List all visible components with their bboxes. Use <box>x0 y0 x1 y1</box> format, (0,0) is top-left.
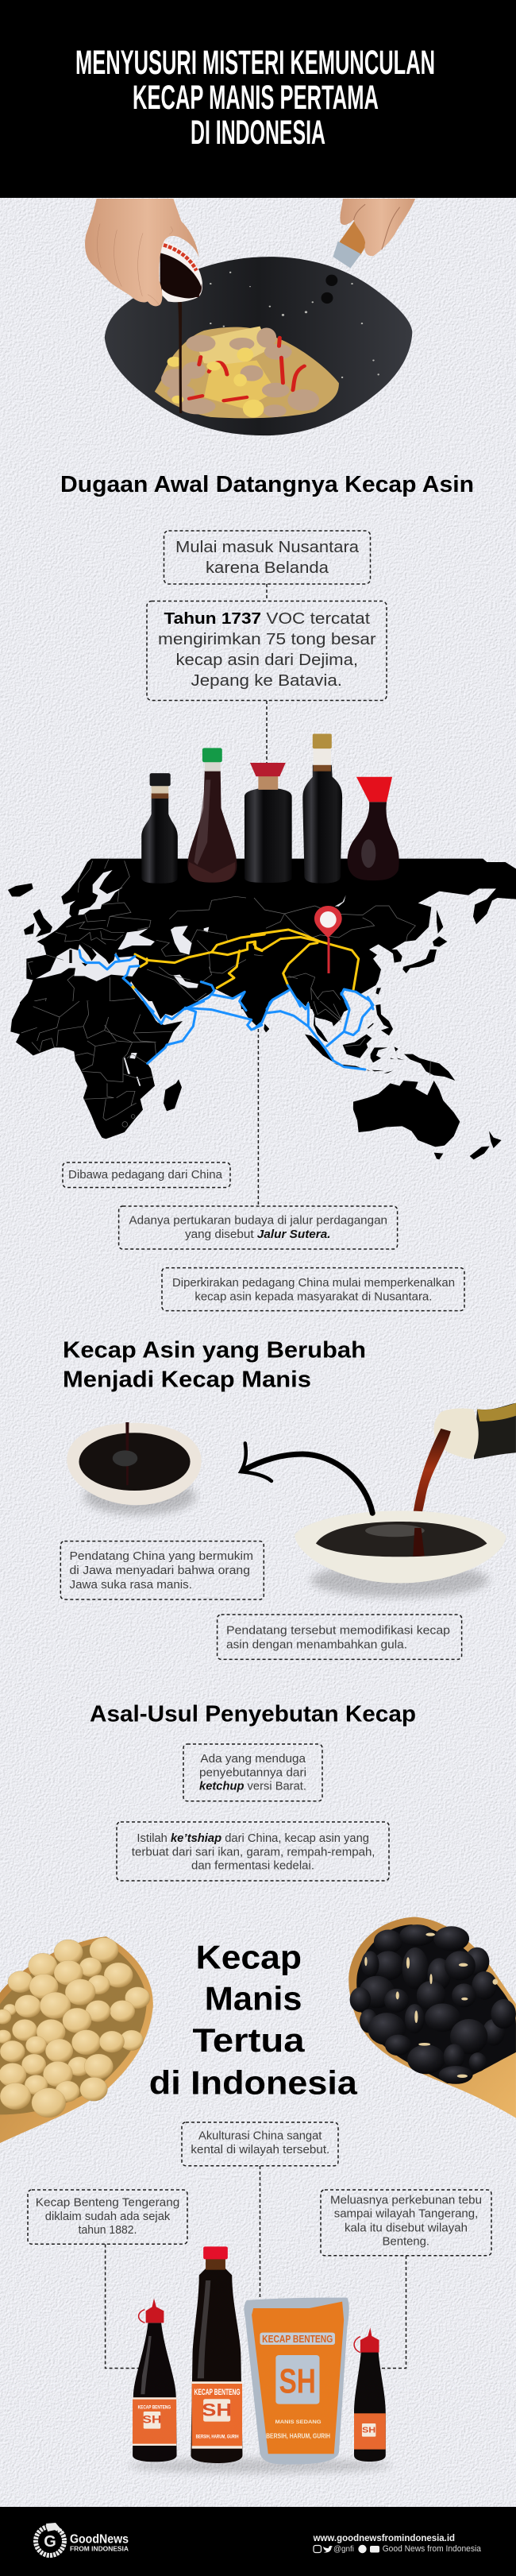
callout: Kecap Benteng Tengerang: Kecap Benteng Tengerang <box>36 2196 179 2210</box>
borders East Asia <box>254 898 415 1009</box>
Indian peninsula <box>241 953 288 1027</box>
callout: Meluasnya perkebunan tebu: Meluasnya perkebunan tebu <box>330 2193 482 2207</box>
product shadow <box>129 2458 391 2474</box>
Arabian south coast <box>152 1001 204 1019</box>
Lake Balkhash <box>248 923 262 928</box>
Indochina and Malay peninsula <box>311 1000 349 1042</box>
callout: Istilah ke'tshiap: dan fermentasi kedelai. <box>191 1859 314 1872</box>
bottle 5 <box>348 777 399 880</box>
title <box>75 44 435 152</box>
callout: Tahun 1737 <box>147 601 387 701</box>
Palawan <box>368 1023 374 1029</box>
bottle 1 <box>141 773 178 884</box>
Sri Lanka <box>264 1023 269 1032</box>
connector: box to box <box>266 584 268 601</box>
bottle: small <box>354 2327 386 2462</box>
callout: Mulai masuk Nusantara: karena Belanda <box>206 559 329 577</box>
maritime routes in blue <box>79 950 373 1069</box>
callout: Akulturasi China <box>182 2122 338 2166</box>
Mediterranean Sea <box>36 942 139 981</box>
East Asia landmass <box>246 859 516 1009</box>
callout: Istilah ke'tshiap: Istilah ke’tshiap dari China, kecap asin yang <box>137 1831 369 1845</box>
Papua <box>404 1054 455 1081</box>
Tasmania <box>434 1153 443 1159</box>
Sakhalin <box>437 910 443 934</box>
callout: Tahun 1737: Tahun 1737 VOC tercatat <box>164 609 370 628</box>
African lakes <box>124 1053 141 1086</box>
refill pouch: BERSIH, HARUM, GURIH <box>266 2432 330 2439</box>
left hand <box>85 199 199 306</box>
callout: Ada yang menduga: penyebutannya dari <box>199 1766 306 1779</box>
heading: Kecap Manis Tertua di Indonesia <box>149 1938 357 2101</box>
callout: Akulturasi China: kental di wilayah tersebut. <box>191 2143 329 2156</box>
logo: GoodNews from Indonesia: FROM INDONESIA <box>70 2546 129 2552</box>
callout: Pendatang China yang bermukim: Jawa suka rasa manis. <box>70 1578 192 1592</box>
heading: Kecap Asin yang Berubah Menjadi Kecap Manis: Kecap Asin yang Berubah <box>63 1338 366 1363</box>
bottle 3 <box>245 763 292 883</box>
Sulawesi <box>371 1047 387 1062</box>
borders Europe and Middle East <box>28 860 262 1007</box>
Mediterranean islands <box>69 950 88 966</box>
callout: Pendatang tersebut memodifikasi: Pendatang tersebut memodifikasi kecap <box>226 1624 450 1638</box>
callout: Adanya pertukaran budaya: Adanya pertukaran budaya di jalur perdagangan <box>129 1214 387 1227</box>
callout: Tahun 1737: kecap asin dari Dejima, <box>176 651 358 669</box>
sauce bowls illustration <box>67 1403 516 1597</box>
bottle: medium <box>133 2299 177 2462</box>
pouring bottle <box>411 1403 516 1530</box>
curved arrow <box>241 1443 372 1513</box>
Lake Baikal <box>335 895 346 907</box>
bottle: large: BERSIH, HARUM, GURIH <box>196 2435 239 2439</box>
red chili <box>189 338 304 400</box>
connector: centre <box>259 2166 260 2303</box>
callout: Adanya pertukaran budaya: yang disebut Jalur Sutera. <box>185 1228 330 1241</box>
callout: Tahun 1737: Jepang ke Batavia. <box>191 671 342 690</box>
callout: Pendatang tersebut memodifikasi: asin dengan menambahkan gula. <box>226 1638 407 1651</box>
Red Sea <box>129 981 156 1009</box>
refill pouch: SH <box>279 2363 316 2400</box>
pouring hand and bowl <box>85 199 202 413</box>
website and social handles: www.goodnewsfromindonesia.id <box>313 2534 455 2543</box>
right hand <box>340 199 415 256</box>
bottle: large <box>191 2246 242 2463</box>
Aral Sea <box>204 927 209 932</box>
Great Britain <box>33 909 52 937</box>
title: DI INDONESIA <box>191 114 325 152</box>
callout: Istilah ke'tshiap <box>117 1822 389 1881</box>
borders Southeast Asia <box>314 1001 430 1075</box>
footer band <box>0 2507 516 2576</box>
callout: Dibawa pedagang dari China <box>63 1162 230 1187</box>
Maluku <box>391 1046 403 1060</box>
icon: instagram <box>314 2546 321 2552</box>
Borneo <box>343 1035 372 1058</box>
Europe and Middle East landmass <box>8 859 264 1009</box>
Hokkaido <box>433 936 447 947</box>
header band <box>0 0 516 198</box>
soy sauce bottles row <box>141 734 399 884</box>
website and social handles <box>313 2534 482 2554</box>
Caspian Sea <box>171 926 192 955</box>
callout: Ada yang menduga: Ada yang menduga <box>200 1752 306 1766</box>
hero photo: wok and hands <box>85 199 415 435</box>
Iceland <box>8 884 33 896</box>
Madagascar <box>164 1079 182 1111</box>
Africa <box>10 1001 204 1139</box>
connector: right <box>381 2256 406 2368</box>
callout: Adanya pertukaran budaya <box>119 1206 398 1249</box>
callout: Pendatang tersebut memodifikasi <box>218 1615 462 1659</box>
egg pieces <box>168 347 264 418</box>
callout: Kecap Benteng Tengerang <box>28 2190 187 2244</box>
bowl with sweet soy sauce <box>67 1422 202 1515</box>
heading: Kecap Manis Tertua di Indonesia: Tertua <box>192 2021 305 2059</box>
Southeast Asia and Oceania <box>264 1000 502 1159</box>
bottle: large: KECAP BENTENG <box>194 2386 241 2397</box>
heading: Dugaan Awal Datangnya Kecap Asin: Dugaan Awal Datangnya Kecap Asin <box>60 472 474 497</box>
connector: left <box>106 2244 143 2368</box>
wok speckles <box>141 272 379 378</box>
spoons of beans <box>0 1917 516 2143</box>
wooden spoon with soybeans <box>0 1936 153 2143</box>
Java and Lesser Sunda <box>333 1063 393 1073</box>
handle: gnfi: @gnfi <box>333 2544 354 2554</box>
bottle: medium: KECAP BENTENG <box>138 2404 171 2410</box>
finger creases <box>97 224 172 304</box>
heading: Kecap Asin yang Berubah Menjadi Kecap Manis: Menjadi Kecap Manis <box>63 1367 311 1392</box>
soybeans <box>0 1938 150 2118</box>
heading: Kecap Manis Tertua di Indonesia: Manis <box>205 1980 302 2017</box>
Sumatra <box>305 1035 333 1062</box>
stir fry food <box>155 327 339 418</box>
bottle 4 <box>302 734 342 884</box>
Taiwan <box>375 988 381 995</box>
icon: facebook <box>358 2545 367 2553</box>
icon: youtube <box>370 2546 379 2552</box>
callout: Meluasnya perkebunan tebu: kala itu disebut wilayah <box>345 2221 468 2234</box>
Honshu <box>402 950 437 973</box>
Persian Gulf <box>173 975 198 988</box>
wooden spoon with black beans <box>348 1917 516 2118</box>
Ireland <box>24 923 34 935</box>
callout: Pendatang China yang bermukim <box>60 1541 264 1599</box>
callout: Dibawa pedagang dari China: Dibawa pedagang dari China <box>68 1168 223 1182</box>
bottle 2 <box>187 748 237 883</box>
bottle: large: SH <box>202 2401 232 2420</box>
heading: Asal-Usul Penyebutan Kecap: Asal-Usul Penyebutan Kecap <box>90 1701 416 1727</box>
Black Sea <box>117 928 155 950</box>
heading: Kecap Manis Tertua di Indonesia: Kecap <box>196 1938 302 1975</box>
Philippines <box>375 1004 393 1035</box>
callout: Diperkirakan pedagang China: Diperkirakan pedagang China mulai memperkenalkan <box>172 1276 455 1290</box>
refill pouch <box>244 2298 349 2465</box>
Kecap Benteng products <box>129 2246 391 2474</box>
plate with soy sauce <box>295 1510 506 1597</box>
callout: Pendatang China yang bermukim: Pendatang China yang bermukim <box>70 1549 253 1563</box>
meatballs <box>161 327 319 417</box>
black beans <box>350 1924 516 2084</box>
bean hilum marks <box>364 1932 498 2078</box>
bottle: medium: SH <box>142 2414 162 2426</box>
callout: Meluasnya perkebunan tebu: sampai wilayah Tangerang, <box>334 2207 478 2221</box>
New Zealand <box>470 1131 502 1159</box>
logo: GoodNews from Indonesia <box>36 2523 129 2555</box>
sauce stream <box>178 301 182 413</box>
callout: Tahun 1737: mengirimkan 75 tong besar <box>158 630 376 648</box>
logo: GoodNews from Indonesia: GoodNews <box>70 2533 129 2547</box>
location pin <box>314 906 342 973</box>
refill pouch: MANIS SEDANG <box>275 2419 322 2425</box>
wok rivets <box>322 275 337 304</box>
borders Africa <box>21 1001 172 1120</box>
callout: Mulai masuk Nusantara: Mulai masuk Nusantara <box>175 538 360 556</box>
callout: Kecap Benteng Tengerang: diklaim sudah ada sejak <box>45 2210 171 2223</box>
Red Sea south <box>144 1001 162 1024</box>
callout: Mulai masuk Nusantara <box>164 531 370 584</box>
callout: Ada yang menduga: ketchup versi Barat. <box>199 1780 306 1793</box>
callout: Istilah ke'tshiap: terbuat dari sari ikan, garam, rempah-rempah, <box>132 1845 375 1859</box>
heading: Kecap Asin yang Berubah Menjadi Kecap Manis <box>63 1338 366 1392</box>
bottle: small: SH <box>362 2427 375 2435</box>
page name: Good News from Indonesia <box>383 2544 482 2554</box>
refill pouch: KECAP BENTENG <box>262 2333 333 2346</box>
wok handle <box>333 217 368 268</box>
world map <box>8 859 516 1159</box>
callout: Ada yang menduga <box>183 1744 322 1801</box>
small bowl <box>160 241 202 302</box>
Australia <box>353 1081 460 1147</box>
connector: box to bottles <box>266 701 268 763</box>
Baltic Sea <box>78 870 123 915</box>
wok <box>105 257 412 435</box>
callout: Diperkirakan pedagang China: kecap asin kepada masyarakat di Nusantara. <box>194 1290 432 1303</box>
callout: Meluasnya perkebunan tebu <box>321 2190 491 2256</box>
icon: twitter <box>323 2546 333 2553</box>
callout: Kecap Benteng Tengerang: tahun 1882. <box>79 2223 137 2237</box>
connector: map to callout <box>257 1029 259 1206</box>
heading: Kecap Manis Tertua di Indonesia: di Indonesia <box>149 2064 357 2101</box>
land routes in yellow <box>131 930 359 991</box>
callout: Meluasnya perkebunan tebu: Benteng. <box>383 2235 429 2249</box>
callout: Diperkirakan pedagang China <box>162 1268 464 1311</box>
callout: Pendatang China yang bermukim: di Jawa menyadari bahwa orang <box>70 1564 250 1577</box>
callout: Akulturasi China: Akulturasi China sangat <box>198 2129 322 2143</box>
logo mark: G <box>44 2533 56 2551</box>
